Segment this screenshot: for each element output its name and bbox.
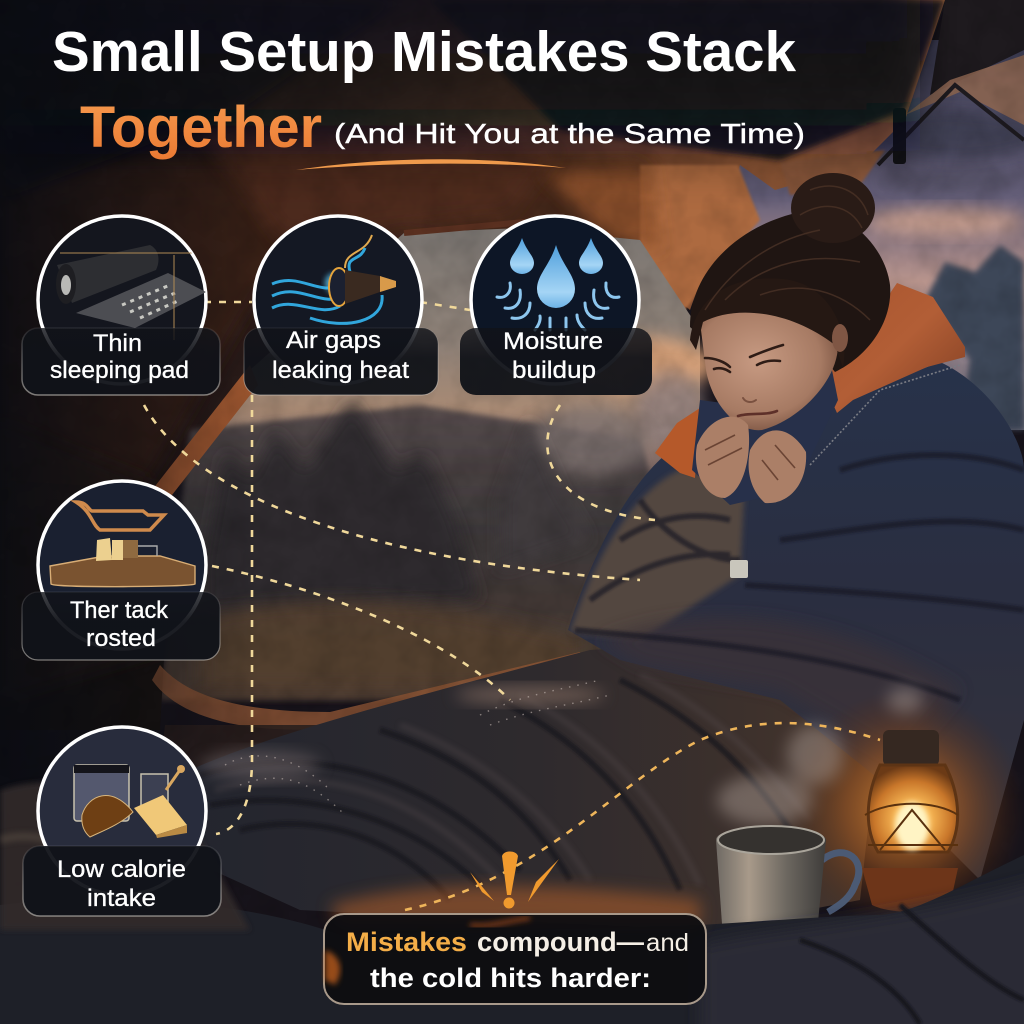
item: thin sleeping pad: [22, 216, 220, 395]
warning icon: exclamation with sparks: [470, 852, 559, 908]
icon circle: moisture: [471, 216, 639, 384]
woman in sleeping bag: [190, 173, 1024, 930]
title: (And Hit You at the Same Time): [334, 118, 805, 149]
title: Together: [80, 95, 322, 160]
title: [52, 20, 805, 170]
tent wall: [0, 0, 1024, 520]
warm glow around the lantern: [785, 690, 1024, 930]
label: low calorie intake: intake: [87, 885, 156, 912]
title: Small Setup Mistakes Stack: [52, 20, 796, 84]
icon circle: food: [38, 727, 206, 895]
frost speckles: [225, 680, 610, 815]
callout: mistakes compound: Mistakes: [346, 927, 467, 957]
orange hood: [828, 283, 965, 413]
hair strands: [705, 186, 870, 320]
foreground blanket: [0, 782, 1024, 1024]
callout: mistakes compound: compound—: [477, 927, 644, 957]
label: air gaps: leaking heat: [272, 357, 409, 384]
landscape with trees: [160, 400, 720, 700]
label: air gaps: [244, 327, 438, 395]
label: thin sleeping pad: [22, 328, 220, 395]
steam: [717, 687, 923, 825]
ear: [832, 324, 848, 352]
icon circle: air gaps: [252, 214, 424, 356]
label: moisture: [460, 328, 652, 395]
brown lit side of the bag: [570, 470, 745, 640]
icon circle: stove: [38, 481, 206, 649]
icon circle: sleeping pad: [38, 216, 206, 384]
label: ther tack rosted: [22, 592, 220, 660]
callout: mistakes compound: [324, 914, 706, 1004]
label: ther tack rosted: Ther tack: [70, 597, 169, 624]
dashed connectors: [144, 302, 880, 910]
lower sleeping bag legs: [190, 640, 880, 930]
tent opening with misty view: [180, 222, 715, 520]
left tent pole and fabric: [0, 365, 585, 770]
zipper: [810, 365, 960, 465]
label: thin sleeping pad: sleeping pad: [50, 357, 189, 384]
left dark vignette: [0, 0, 260, 1024]
label: air gaps: Air gaps: [286, 327, 381, 354]
lantern: [862, 730, 958, 912]
hair fringe: [690, 278, 844, 368]
label: low calorie intake: [23, 846, 221, 916]
left orange collar: [655, 408, 700, 478]
label: moisture: buildup: [512, 357, 596, 384]
item: air gaps: [244, 216, 438, 395]
label: low calorie intake: Low calorie: [57, 856, 186, 883]
label: moisture: Moisture: [503, 328, 603, 355]
blue collar: [692, 370, 838, 505]
torso folds: [575, 455, 1024, 700]
hair back: [690, 211, 890, 372]
hair bun: [791, 173, 875, 243]
mug: [716, 826, 859, 924]
item: moisture buildup: [460, 216, 652, 395]
callout: mistakes compound: and: [646, 929, 689, 957]
label: thin sleeping pad: Thin: [93, 330, 142, 357]
face: [700, 310, 838, 430]
upper sleeping bag torso: [568, 362, 1024, 880]
item: low calorie intake: [23, 727, 221, 916]
sky: [730, 40, 1024, 430]
hands: [696, 417, 806, 503]
item: ther tack rosted: [22, 481, 220, 660]
facial features: [705, 345, 783, 416]
top dark gradient behind title: [0, 0, 920, 185]
callout: mistakes compound: the cold hits harder:: [370, 963, 651, 993]
label: ther tack rosted: rosted: [86, 625, 156, 652]
